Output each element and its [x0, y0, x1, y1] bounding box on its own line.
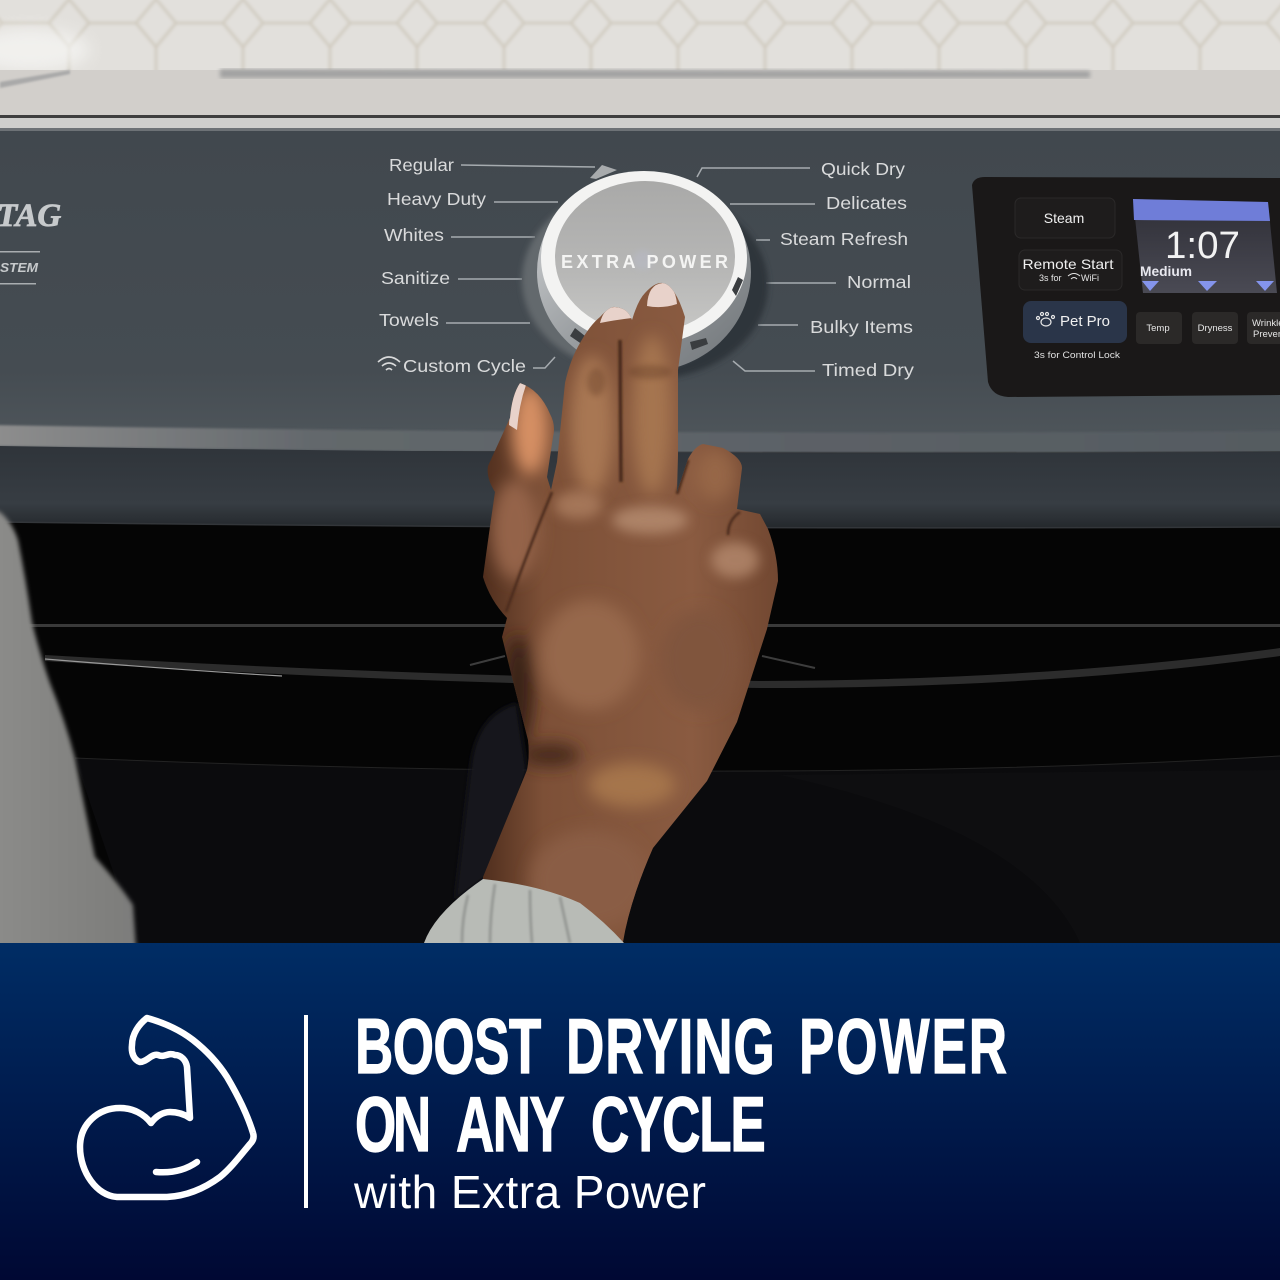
- right cycle labels: [780, 159, 914, 380]
- right cycle labels: Timed Dry: [822, 360, 914, 380]
- dial leader lines: [446, 165, 836, 371]
- back-of-hand tones: [504, 598, 702, 924]
- left cycle labels: Towels: [379, 310, 439, 330]
- headline: BOOST: [355, 1004, 542, 1091]
- headline: POWER: [799, 1004, 1007, 1091]
- sweater cuff: [424, 879, 624, 943]
- button: remote start: WiFi: [1081, 273, 1099, 283]
- touch control panel: [972, 177, 1280, 397]
- vertical divider: [304, 1015, 308, 1208]
- display screen: Medium: [1140, 263, 1192, 279]
- headline: ON: [355, 1082, 431, 1169]
- button: steam: [1015, 198, 1115, 238]
- button: dryness: [1192, 312, 1238, 344]
- button: pet pro: Pet Pro: [1060, 314, 1110, 330]
- button: temp: Temp: [1146, 323, 1170, 334]
- button: remote start: 3s for: [1039, 273, 1062, 283]
- sweater sleeve: [0, 505, 137, 960]
- control panel body: [0, 131, 1280, 451]
- brand logo: STEM: [0, 260, 39, 275]
- display screen: 1:07: [1165, 225, 1240, 267]
- icon: wifi: [378, 357, 400, 370]
- icon: flexed arm: [80, 1018, 254, 1197]
- thumb shading: [491, 385, 548, 580]
- panel lower lip: [0, 425, 1280, 528]
- right cycle labels: Normal: [847, 272, 911, 292]
- button: temp: [1136, 312, 1182, 344]
- button: remote start: [1019, 250, 1122, 290]
- dark dryer door: [0, 522, 1280, 943]
- finger joint shadows: [587, 365, 672, 396]
- finger nails: [509, 283, 677, 430]
- control lock caption: 3s for Control Lock: [1034, 350, 1120, 361]
- subheading: with Extra Power: [353, 1166, 706, 1218]
- skin creases: [506, 340, 740, 612]
- dial knob: [522, 165, 768, 379]
- button: dryness: Dryness: [1198, 323, 1233, 334]
- left cycle labels: Regular: [389, 155, 454, 175]
- button: remote start: Remote Start: [1022, 256, 1114, 272]
- knuckle highlights: [554, 491, 759, 578]
- back of hand: [475, 280, 785, 945]
- button: wrinkle prevent: [1247, 312, 1280, 344]
- right cycle labels: Delicates: [826, 193, 907, 213]
- right cycle labels: Quick Dry: [821, 159, 905, 179]
- right cycle labels: Steam Refresh: [780, 229, 908, 249]
- finger shading: [570, 335, 735, 501]
- left cycle labels: Whites: [384, 225, 444, 245]
- left cycle labels: Sanitize: [381, 268, 450, 288]
- hand: [475, 280, 785, 945]
- left cycle labels: Custom Cycle: [403, 356, 526, 376]
- headline: CYCLE: [591, 1082, 766, 1169]
- headline: DRYING: [566, 1004, 775, 1091]
- left cycle labels: Heavy Duty: [387, 189, 486, 209]
- right cycle labels: Bulky Items: [810, 317, 913, 337]
- dial text: EXTRA POWER: [561, 252, 728, 272]
- headline: [355, 1004, 1007, 1169]
- display screen: [1133, 199, 1277, 293]
- brand logo: [0, 198, 61, 284]
- bottom navy banner: [0, 943, 1280, 1280]
- tile backsplash: [0, 0, 1280, 90]
- button: steam: Steam: [1044, 210, 1084, 226]
- headline: ANY: [456, 1082, 565, 1169]
- button: pet pro: [1023, 301, 1127, 343]
- dryer top surface: [0, 69, 1280, 131]
- left cycle labels: [379, 155, 526, 376]
